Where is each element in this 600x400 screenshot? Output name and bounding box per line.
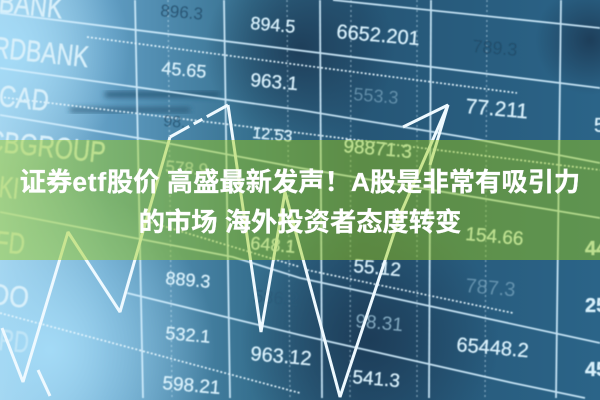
data labels: 586.2 (253, 286, 299, 310)
data labels: 98871.3 (343, 136, 413, 163)
data labels: 154.66 (465, 224, 524, 250)
data labels: 12.53 (252, 125, 293, 145)
data labels: 55.12 (353, 256, 402, 281)
data labels: 894.5 (250, 13, 296, 37)
data labels: 532.1 (165, 323, 211, 347)
title: 的市场 海外投资者态度转变 (139, 207, 461, 237)
data labels: 98. (163, 113, 186, 132)
title: 证券etf股价 高盛最新发声！A股是非常有吸引力 (20, 167, 580, 197)
data labels: 65448.2 (456, 334, 530, 362)
data labels: 896.3 (160, 1, 204, 24)
data labels: 6652.201 (336, 21, 421, 50)
data labels: 789.3 (472, 36, 518, 60)
data labels: 963.1 (250, 70, 299, 95)
data labels: 963.12 (250, 343, 312, 370)
data labels: 648.1 (250, 233, 296, 257)
data labels: 98.31 (355, 311, 404, 336)
green band (0, 140, 600, 260)
data labels: 553.3 (353, 84, 399, 108)
data labels: 598.21 (162, 373, 221, 399)
data labels: 77.211 (465, 95, 529, 123)
data labels: 578.9 (165, 157, 209, 180)
line chart with arrow (2, 105, 448, 397)
data labels: 45.65 (161, 58, 207, 82)
data labels: 787.3 (465, 275, 516, 301)
data labels: 889.3 (165, 268, 211, 292)
title (20, 167, 580, 237)
data labels: 541.3 (352, 367, 401, 392)
